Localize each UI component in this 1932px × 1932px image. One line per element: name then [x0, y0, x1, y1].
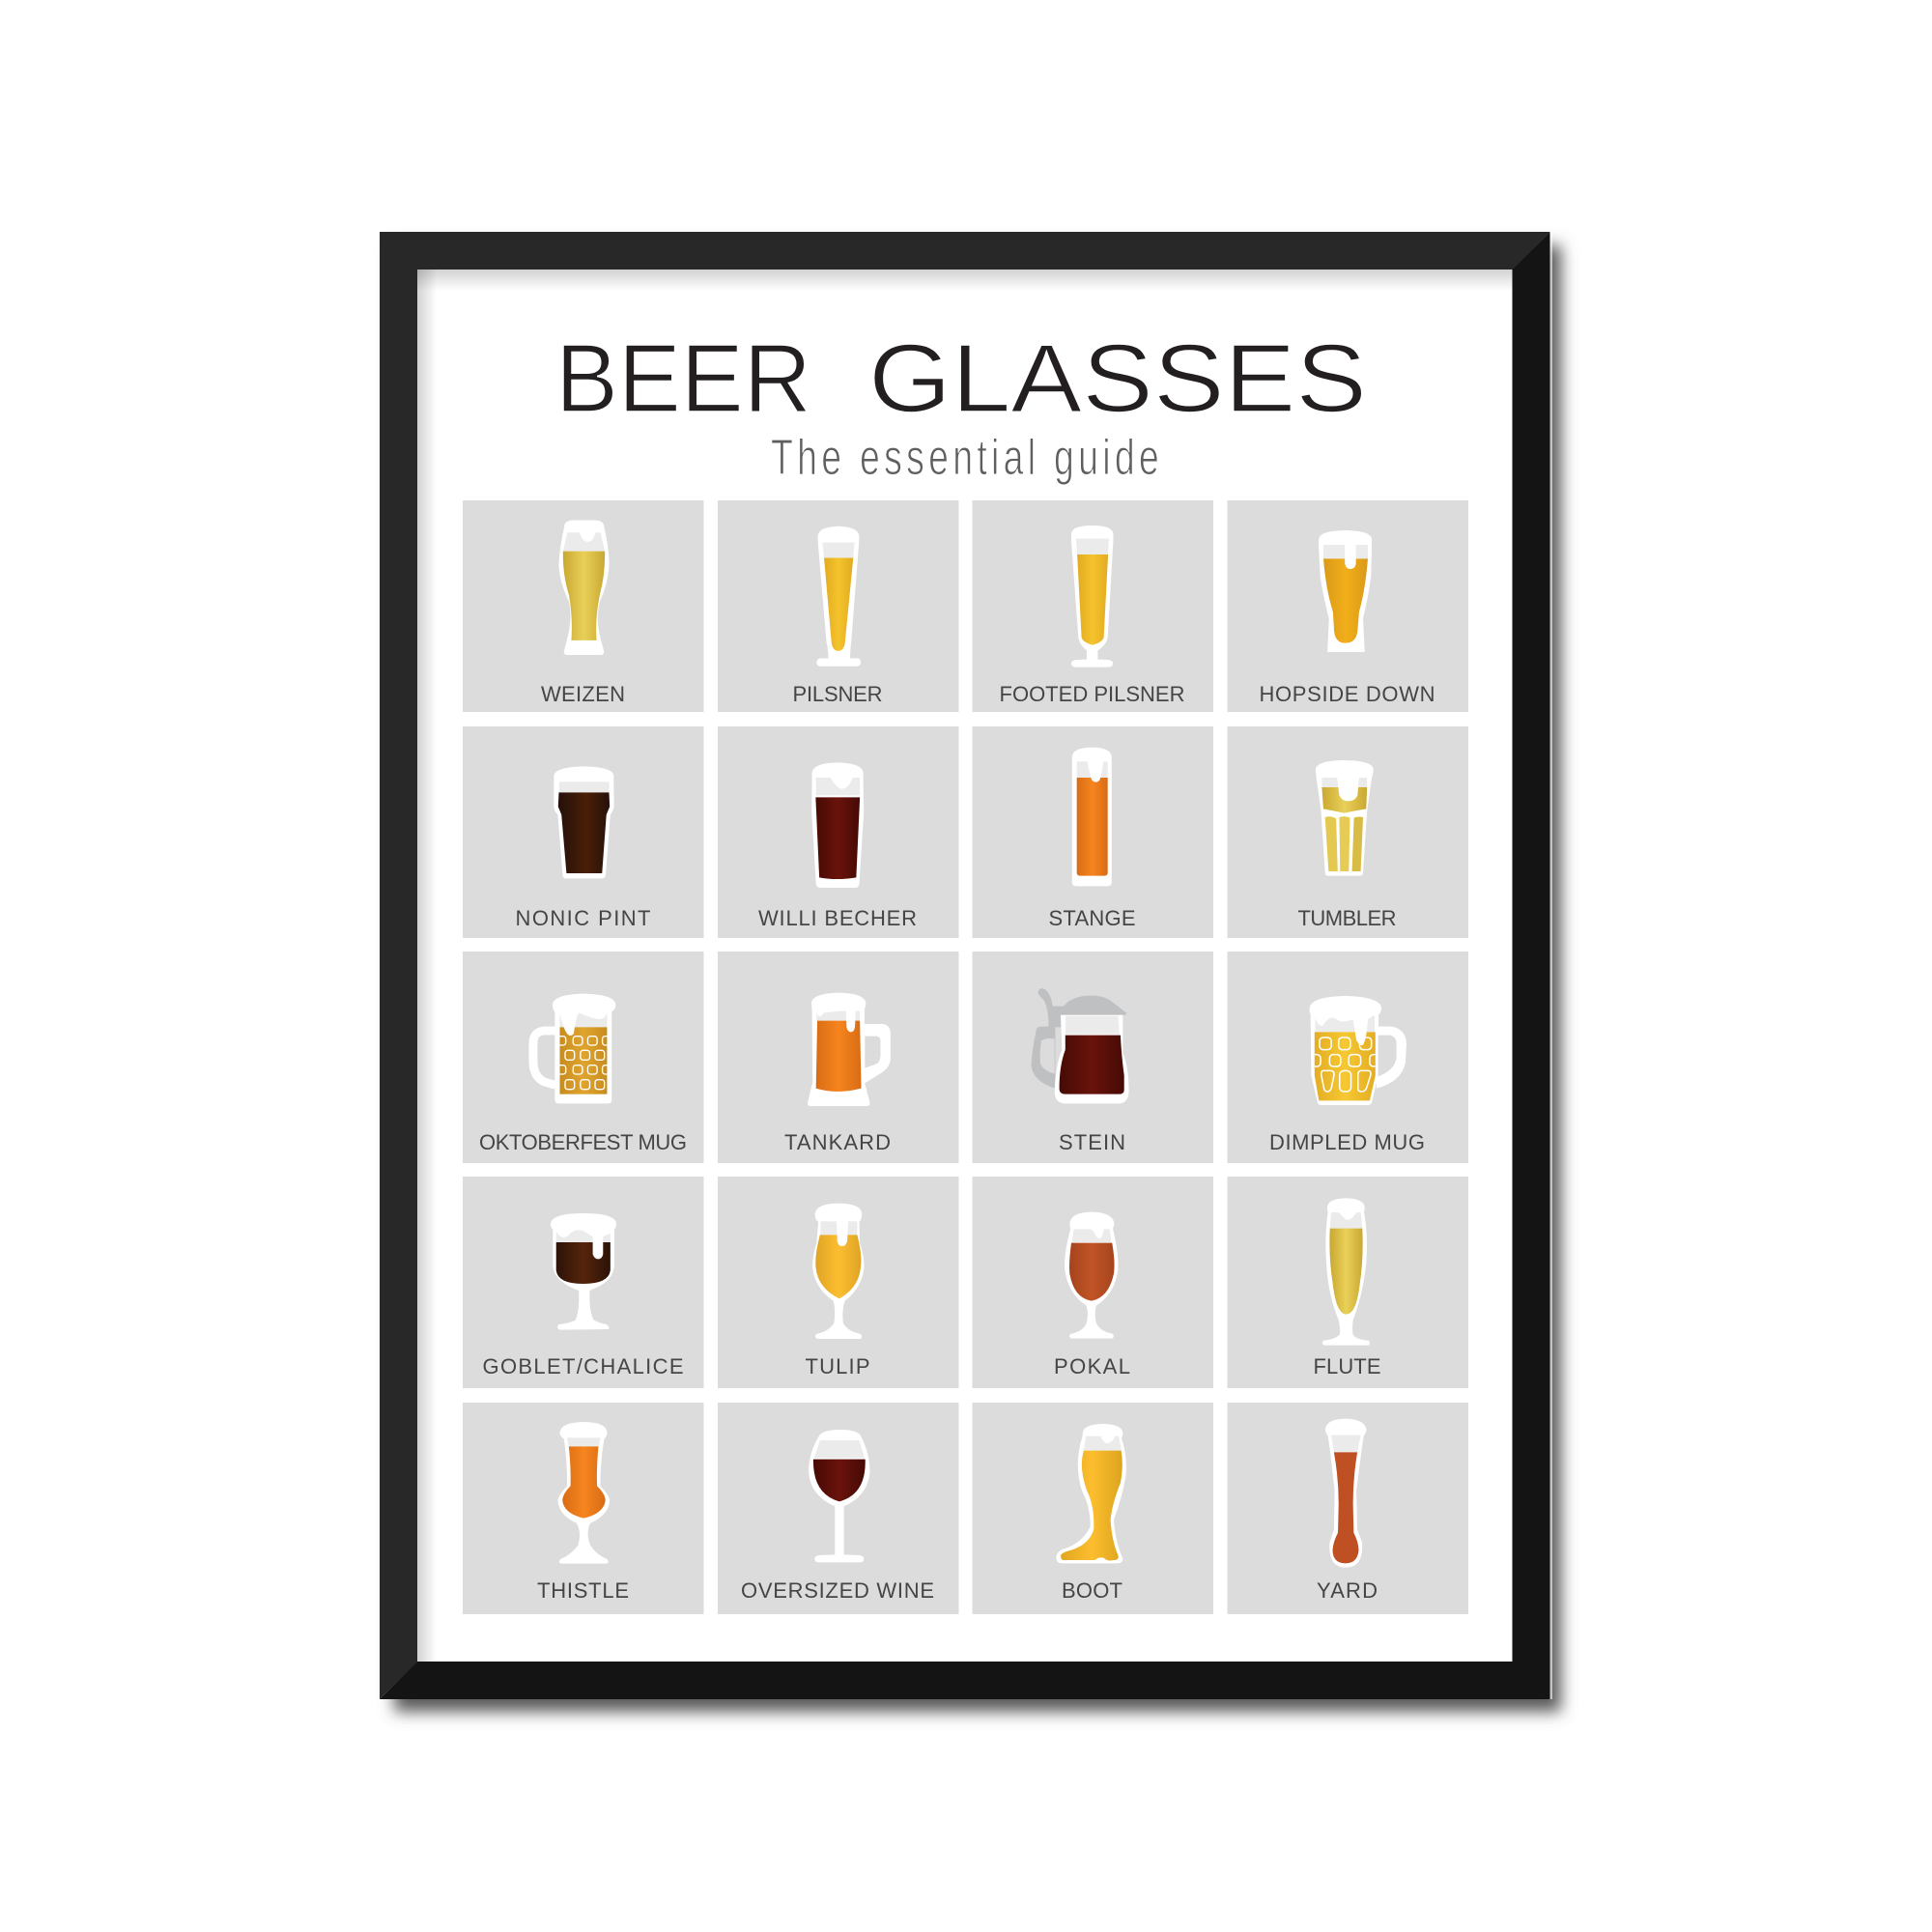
- label: POKAL: [1054, 1354, 1130, 1378]
- panel: hopside down: [1227, 500, 1468, 712]
- icon: yard glass: [1325, 1419, 1366, 1568]
- icon: willi becher glass: [811, 762, 864, 888]
- icon: dimpled mug: [1310, 996, 1406, 1105]
- icon: tulip glass: [812, 1204, 864, 1339]
- label: BOOT: [1062, 1578, 1122, 1603]
- icon: tumbler glass: [1316, 760, 1374, 876]
- panel: weizen: [463, 500, 703, 712]
- icon: oktoberfest mug: [533, 994, 615, 1103]
- picture frame: [380, 232, 1561, 1712]
- panel: footed pilsner: [972, 500, 1213, 712]
- panel: oktoberfest mug: [463, 952, 703, 1163]
- panel: tumbler: [1227, 726, 1468, 938]
- icon: footed pilsner glass: [1071, 526, 1113, 668]
- panel: tulip: [718, 1177, 958, 1388]
- icon: tankard: [808, 993, 891, 1106]
- panel: flute: [1227, 1177, 1468, 1388]
- panel: willi becher: [718, 726, 958, 938]
- label: TULIP: [806, 1354, 869, 1378]
- panel: yard: [1227, 1403, 1468, 1614]
- panel: stein: [972, 952, 1213, 1163]
- title: [555, 325, 1367, 433]
- label: STEIN: [1059, 1130, 1125, 1154]
- panel: pilsner: [718, 500, 958, 712]
- icon: pilsner glass: [816, 526, 861, 667]
- label: NONIC PINT: [516, 906, 651, 930]
- subtitle: The essential guide: [771, 429, 1159, 485]
- panel: boot: [972, 1403, 1213, 1614]
- panel: pokal: [972, 1177, 1213, 1388]
- panel: dimpled mug: [1227, 952, 1468, 1163]
- label: WEIZEN: [541, 682, 625, 706]
- label: TUMBLER: [1298, 906, 1397, 930]
- icon: stange glass: [1072, 748, 1112, 886]
- icon: boot glass: [1056, 1424, 1126, 1563]
- label: WILLI BECHER: [758, 906, 917, 930]
- icon: nonic pint glass: [554, 766, 614, 878]
- icon: hopside down glass: [1319, 530, 1372, 652]
- label: FLUTE: [1314, 1354, 1381, 1378]
- panel: thistle: [463, 1403, 703, 1614]
- icon: flute glass: [1322, 1198, 1370, 1346]
- label: TANKARD: [784, 1130, 891, 1154]
- label: HOPSIDE DOWN: [1260, 682, 1435, 706]
- panel: tankard: [718, 952, 958, 1163]
- label: OVERSIZED WINE: [741, 1578, 934, 1603]
- title: BEER: [555, 325, 811, 433]
- label: GOBLET/CHALICE: [483, 1354, 684, 1378]
- panel: stange: [972, 726, 1213, 938]
- icon: thistle glass: [557, 1422, 610, 1564]
- panel: nonic pint: [463, 726, 703, 938]
- icon: oversized wine glass: [809, 1430, 869, 1562]
- icon: goblet: [551, 1213, 616, 1330]
- label: THISTLE: [537, 1578, 629, 1603]
- label: OKTOBERFEST MUG: [479, 1130, 687, 1154]
- label: PILSNER: [792, 682, 883, 706]
- title: GLASSES: [868, 325, 1367, 433]
- panel: goblet/chalice: [463, 1177, 703, 1388]
- label: DIMPLED MUG: [1269, 1130, 1425, 1154]
- icon: pokal glass: [1065, 1212, 1119, 1339]
- icon: weizen glass: [558, 521, 610, 655]
- label: STANGE: [1049, 906, 1136, 930]
- label: FOOTED PILSNER: [999, 682, 1184, 706]
- icon: stein: [1032, 988, 1129, 1103]
- panel: oversized wine: [718, 1403, 958, 1614]
- label: YARD: [1317, 1578, 1378, 1603]
